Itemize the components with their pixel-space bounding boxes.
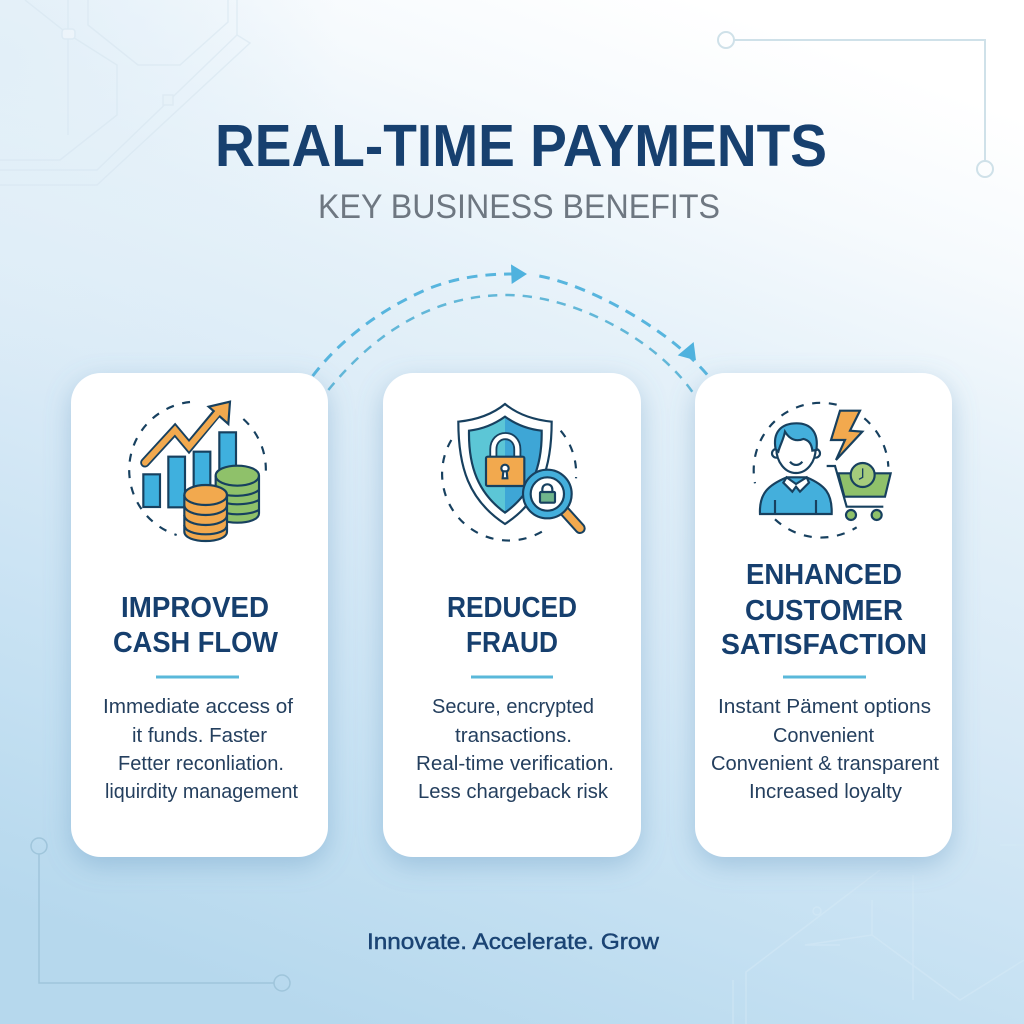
body text: Real-time verification. [416, 753, 614, 775]
icon: bar chart with coins [129, 402, 266, 541]
subtitle: KEY BUSINESS BENEFITS [318, 188, 720, 226]
body text [416, 696, 614, 803]
panel: reduced fraud [383, 373, 641, 857]
heading [721, 559, 927, 661]
heading: CUSTOMER [745, 595, 903, 627]
circuit lines: top right [718, 32, 993, 177]
heading: CASH FLOW [113, 627, 279, 659]
divider [783, 676, 866, 678]
body text: transactions. [455, 725, 572, 747]
heading [113, 592, 279, 659]
circuit lines: bottom right [733, 845, 1024, 1024]
body text: Increased loyalty [749, 781, 902, 803]
circuit lines: top left [0, 0, 250, 185]
heading: SATISFACTION [721, 629, 927, 661]
divider [471, 676, 553, 678]
body text: Less chargeback risk [418, 781, 609, 803]
footer tagline: Innovate. Accelerate. Grow [367, 929, 659, 954]
panel: improved cash flow [71, 373, 328, 857]
body text: it funds. Faster [132, 725, 267, 747]
icon: shield with lock and magnifier [442, 404, 580, 541]
body text: Secure, encrypted [432, 696, 594, 718]
body text [711, 696, 939, 803]
body text: liquirdity management [105, 781, 298, 803]
heading: REDUCED [447, 592, 577, 624]
body text: Fetter reconliation. [118, 753, 284, 775]
divider [156, 676, 239, 678]
heading [447, 592, 577, 659]
body text: Convenient [773, 725, 874, 747]
flow arrows [313, 264, 708, 398]
circuit lines: bottom left [31, 838, 290, 991]
heading: FRAUD [466, 627, 558, 659]
heading: IMPROVED [121, 592, 269, 624]
heading: ENHANCED [746, 559, 902, 591]
title: REAL-TIME PAYMENTS [215, 113, 827, 179]
panel: enhanced customer satisfaction [695, 373, 952, 857]
icon: customer with lightning bolt and cart [754, 403, 891, 538]
body text: Immediate access of [103, 696, 293, 718]
body text [103, 696, 298, 803]
body text: Convenient & transparent [711, 753, 939, 775]
body text: Instant Päment options [718, 696, 931, 718]
